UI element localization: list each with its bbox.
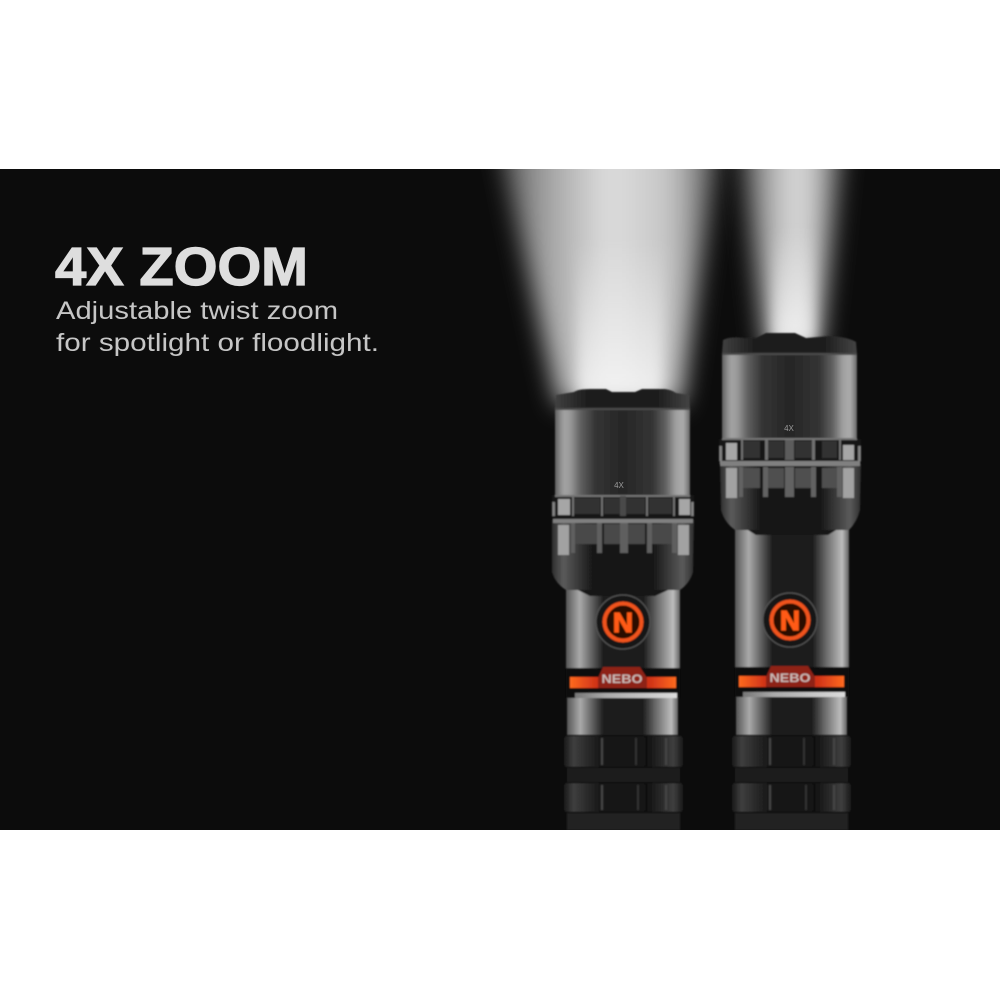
panel: dark background — [0, 169, 1000, 830]
second ring — [553, 519, 693, 523]
silver stripe — [743, 692, 845, 697]
beam core: left flashlight — [572, 277, 668, 392]
NEBO label: NEBO — [602, 672, 642, 686]
power button: N — [780, 605, 800, 636]
power button — [763, 593, 817, 647]
beam: left flashlight — [495, 130, 722, 405]
NEBO label: NEBO — [770, 671, 810, 685]
flashlight: left — [552, 389, 694, 830]
orange stripe — [739, 676, 844, 687]
bezel — [722, 333, 857, 355]
barrel highlights — [560, 405, 686, 500]
4X marking: 4X — [614, 481, 625, 490]
beam: right flashlight — [738, 130, 846, 350]
lower barrel — [567, 698, 678, 735]
second ring — [720, 461, 860, 466]
lower cone — [720, 464, 861, 530]
collar band — [735, 667, 849, 697]
lower cone — [552, 520, 694, 590]
barrel — [722, 355, 857, 442]
power button — [596, 595, 650, 649]
neck — [566, 590, 680, 670]
infographic — [0, 169, 1000, 830]
description text: for spotlight or floodlight. — [56, 329, 379, 357]
beam core: right flashlight — [772, 230, 815, 345]
grip — [564, 736, 683, 830]
first ring — [552, 495, 694, 520]
collar band — [566, 668, 680, 698]
first ring — [719, 439, 861, 464]
lower barrel — [736, 697, 847, 735]
barrel — [555, 410, 690, 497]
silver stripe — [575, 693, 677, 698]
orange stripe — [570, 677, 676, 688]
grip — [732, 736, 851, 830]
title: 4X ZOOM — [55, 237, 308, 297]
description text: Adjustable twist zoom — [56, 297, 338, 325]
bezel — [555, 389, 690, 410]
flashlight: right — [719, 333, 861, 830]
light beams — [495, 130, 846, 405]
description text — [56, 297, 379, 357]
neck — [735, 530, 849, 670]
barrel highlights — [727, 350, 853, 445]
4X marking: 4X — [784, 424, 795, 433]
power button: N — [613, 607, 633, 638]
